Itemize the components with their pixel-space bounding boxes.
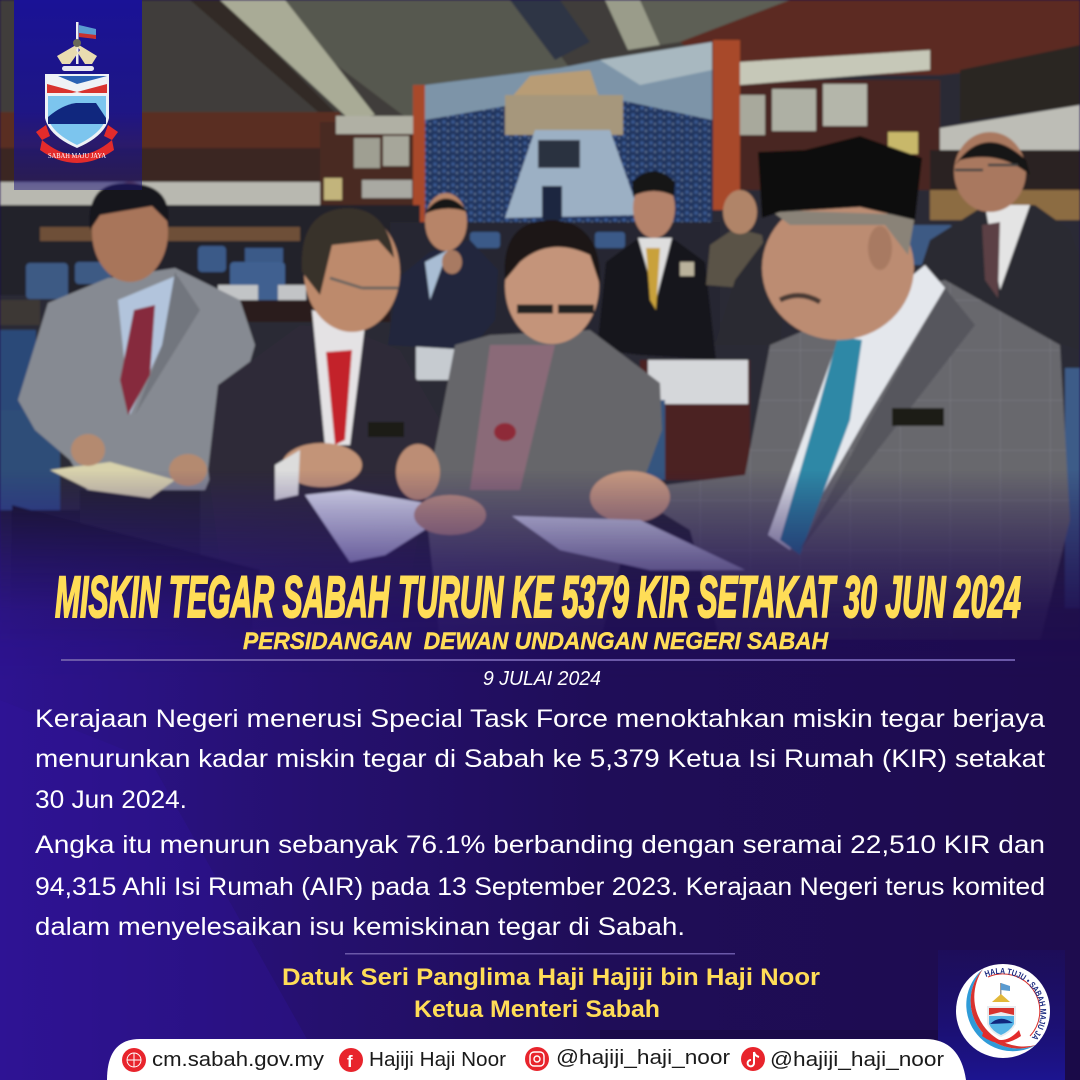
facebook name: Hajiji Haji Noor xyxy=(369,1049,506,1071)
circular emblem: HALA TUJU • SABAH MAJU JAYA xyxy=(984,968,1046,1040)
person: far right man xyxy=(915,132,1080,350)
subtitle: PERSIDANGAN DEWAN UNDANGAN NEGERI SABAH xyxy=(243,628,829,655)
paragraph 2 xyxy=(35,831,1045,941)
icon: facebook xyxy=(339,1048,363,1072)
website: cm.sabah.gov.my xyxy=(152,1049,324,1071)
Sabah crest: SABAH MAJU JAYA xyxy=(48,152,106,160)
tiktok handle: @hajiji_haji_noor xyxy=(770,1049,944,1071)
person: centre man grey suit xyxy=(305,220,662,640)
date: 9 JULAI 2024 xyxy=(483,668,601,690)
photo background: assembly hall xyxy=(0,0,1080,640)
person: left man in grey suit xyxy=(18,182,255,610)
paragraph 1: menurunkan kadar miskin tegar di Sabah ke 5,379 Ketua Isi Rumah (KIR) setakat xyxy=(35,745,1045,773)
Sabah crest xyxy=(36,22,118,163)
paragraph 1: 30 Jun 2024. xyxy=(35,786,187,814)
icon: web xyxy=(122,1048,146,1072)
signatory role: Ketua Menteri Sabah xyxy=(414,996,660,1023)
bottom-right logo panel xyxy=(938,950,1065,1080)
logo backing panel xyxy=(14,0,142,190)
signatory name: Datuk Seri Panglima Haji Hajiji bin Haji Noor xyxy=(282,964,820,991)
person: second man dark suit xyxy=(208,208,440,640)
purple gradient overlay and bottom panel xyxy=(0,470,1080,1080)
paragraph 2: dalam menyelesaikan isu kemiskinan tegar di Sabah. xyxy=(35,913,685,941)
paragraph 1 xyxy=(35,705,1045,814)
big screen xyxy=(425,42,712,222)
social media bar xyxy=(107,1039,966,1080)
paragraph 2: 94,315 Ahli Isi Rumah (AIR) pada 13 September 2023. Kerajaan Negeri terus komited xyxy=(35,873,1045,901)
person: back row men behind right xyxy=(706,190,785,345)
desk laptop outline xyxy=(10,505,260,640)
person: right man in checked suit with songkok xyxy=(512,136,1070,640)
icon: tiktok xyxy=(741,1047,765,1071)
instagram handle: @hajiji_haji_noor xyxy=(556,1047,730,1069)
paragraph 2: Angka itu menurun sebanyak 76.1% berbanding dengan seramai 22,510 KIR dan xyxy=(35,831,1045,859)
person: back row man with songkok xyxy=(597,171,716,360)
paragraph 1: Kerajaan Negeri menerusi Special Task Force menoktahkan miskin tegar berjaya xyxy=(35,705,1045,733)
person: back row man centre-left xyxy=(388,193,498,350)
icon: facebook: f xyxy=(347,1052,353,1071)
icon: instagram xyxy=(525,1047,549,1071)
